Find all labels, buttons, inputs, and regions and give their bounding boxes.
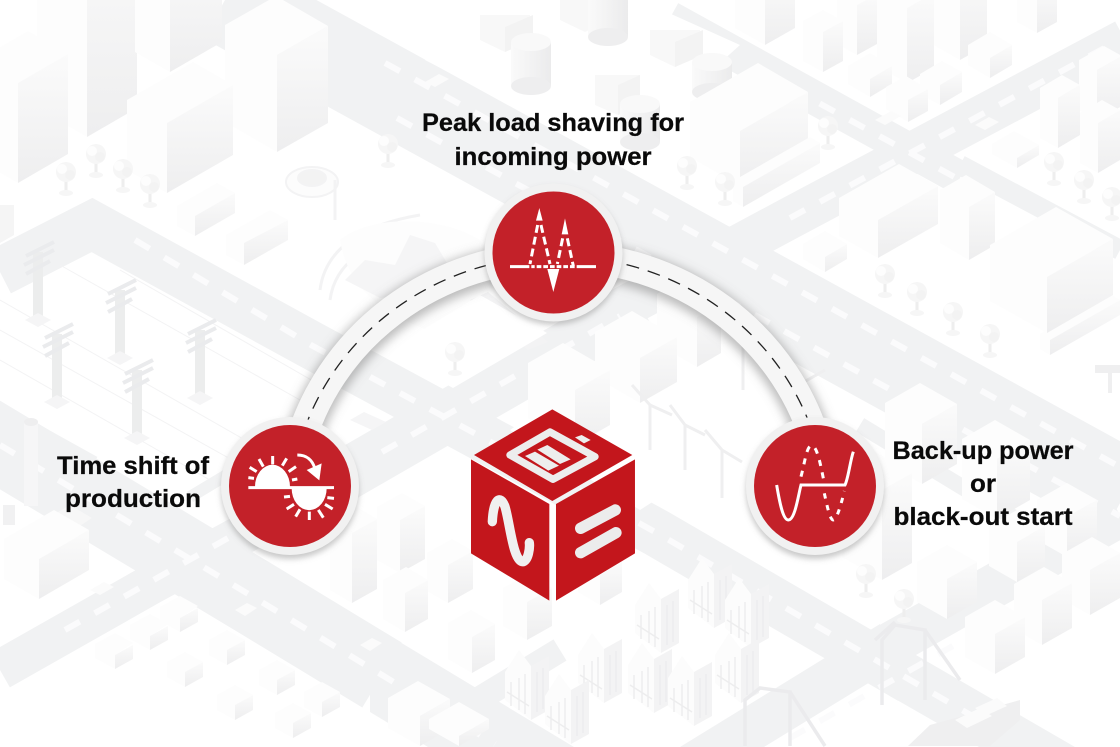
label: peak load shaving: Peak load shaving for (422, 109, 684, 137)
label: black-out start: black-out start (894, 503, 1073, 531)
centre lower towers (330, 506, 377, 603)
cars (90, 74, 999, 651)
lower right blocks (885, 383, 957, 484)
icon: waveform restart (777, 446, 853, 520)
mid city blocks (510, 340, 780, 510)
icon: sun shift (248, 455, 334, 520)
arc road connecting the three stations (298, 256, 818, 453)
label: back-up power: Back-up power (892, 437, 1074, 465)
battery on top face (510, 432, 595, 479)
equals bars on right face (581, 510, 616, 553)
factory and chimney (24, 422, 38, 506)
houses (635, 583, 679, 653)
white plaza with tree (387, 295, 547, 388)
station: time shift of production (221, 417, 359, 559)
central plant (286, 167, 430, 300)
pylons (24, 242, 54, 327)
right side mid blocks (690, 63, 808, 186)
ship (908, 700, 1020, 746)
upper right blocks (735, 0, 795, 45)
upper left towers (37, 0, 137, 137)
power lines (0, 265, 320, 480)
station: back-up power (746, 417, 884, 559)
low blocks bottom left (95, 633, 133, 669)
central cube icon (471, 409, 635, 601)
icon: peak load spikes (510, 208, 596, 292)
label: or: or (970, 470, 996, 498)
label: incoming power: incoming power (454, 143, 652, 171)
station: peak load shaving (484, 184, 622, 325)
port cranes (745, 622, 960, 746)
label: production: production (65, 485, 201, 513)
label: time shift: Time shift of (57, 452, 210, 480)
sine wave on left face (492, 500, 529, 562)
refinery plaza and tanks (425, 0, 740, 135)
trees (56, 162, 76, 196)
wind turbines (632, 340, 825, 498)
low blocks left (177, 183, 235, 236)
